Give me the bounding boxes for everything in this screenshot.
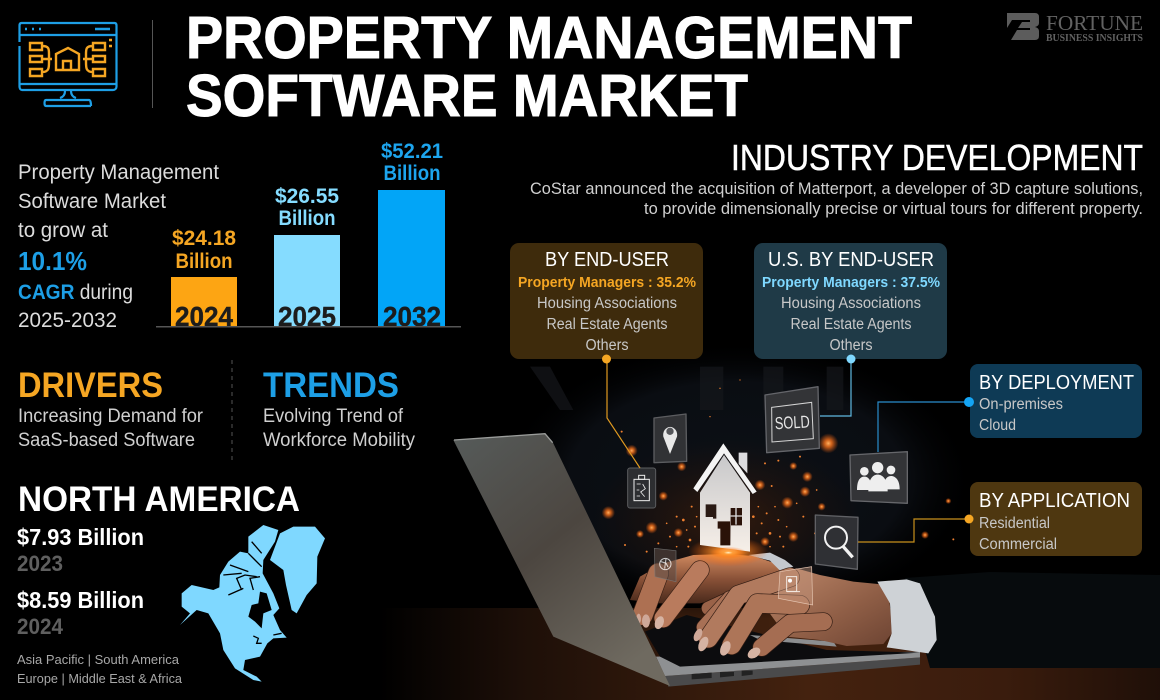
dark backdrop <box>497 340 977 620</box>
market growth text: Property Management <box>18 161 219 184</box>
laptop lid <box>453 433 670 686</box>
panel: U.S. by end-user: U.S. BY END-USER <box>768 249 934 271</box>
industry development: CoStar announced the acquisition of Matterport, a developer of 3D capture solutions, <box>530 179 1143 198</box>
connector: by end-user <box>607 359 640 468</box>
icon: house <box>693 443 757 559</box>
industry development <box>530 137 1143 218</box>
panel: north america: Asia Pacific | South America <box>17 652 180 667</box>
orange haze <box>593 440 860 600</box>
bar 2024: Billion <box>176 250 232 273</box>
bar 2024: 2024 <box>175 301 233 332</box>
panel: U.S. by end-user: Others <box>830 337 873 354</box>
panel: north america: 2023 <box>17 551 63 576</box>
laptop lid and floating icons <box>453 387 907 686</box>
market growth text <box>18 161 219 332</box>
panel: by deployment: BY DEPLOYMENT <box>979 372 1134 394</box>
panel: by end-user: Others <box>586 337 629 354</box>
panel: by deployment <box>964 364 1142 438</box>
divider <box>152 20 153 108</box>
market growth text: CAGR during <box>18 281 133 304</box>
photo: laptop with hands and floating property icons <box>497 340 977 620</box>
title: PROPERTY MANAGEMENT <box>186 5 912 71</box>
panel: by deployment: On-premises <box>979 396 1063 413</box>
particles <box>555 433 951 546</box>
panel: by end-user: Housing Associations <box>537 295 677 312</box>
icon: SOLD card: SOLD <box>774 411 810 433</box>
panel: trends: TRENDS <box>263 366 399 405</box>
panel: trends: Workforce Mobility <box>263 430 415 451</box>
icon: clipboard card <box>628 468 656 508</box>
title: SOFTWARE MARKET <box>186 63 748 129</box>
icon: magnifier card <box>815 515 858 569</box>
panel: by end-user: Property Managers : 35.2% <box>518 275 696 291</box>
market growth text: 2025-2032 <box>18 309 117 332</box>
bar 2025: 2025 <box>278 301 336 332</box>
icon: globe card <box>654 548 676 582</box>
panel: north america: 2024 <box>17 614 64 639</box>
shirt cuff left <box>748 553 793 571</box>
connector: by deployment <box>878 402 968 452</box>
map: North America <box>180 525 325 682</box>
panel: by end-user <box>510 243 703 364</box>
bar chart <box>156 140 461 332</box>
panel: by application: Commercial <box>979 536 1057 553</box>
icon: location pin card <box>654 414 687 463</box>
panel: by application: BY APPLICATION <box>979 490 1130 512</box>
panel: drivers <box>18 366 204 451</box>
right hand <box>692 568 892 661</box>
panel: by end-user: BY END-USER <box>545 249 669 271</box>
panel: U.S. by end-user: Housing Associations <box>781 295 921 312</box>
market growth text: to grow at <box>18 219 108 242</box>
market growth text: Software Market <box>18 190 166 213</box>
logo: Fortune Business Insights: FORTUNE <box>1046 11 1143 35</box>
shirt cuff right <box>877 579 937 653</box>
bar 2024: $24.18 <box>172 227 236 250</box>
panel: by end-user: Real Estate Agents <box>546 316 668 333</box>
logo: Fortune Business Insights <box>1007 11 1143 44</box>
left hand <box>630 554 780 630</box>
connector: by application <box>858 519 968 542</box>
panel: drivers: DRIVERS <box>18 366 163 405</box>
panel: north america: $8.59 Billion <box>17 587 144 613</box>
laptop base <box>645 615 920 687</box>
icon: people card <box>850 452 907 503</box>
panel: by application <box>964 482 1142 556</box>
bar 2025 <box>274 185 340 332</box>
panel: north america: NORTH AMERICA <box>18 480 300 519</box>
bar 2032 <box>378 140 445 332</box>
icon: document card on hand <box>778 567 813 605</box>
panel: north america: $7.93 Billion <box>17 524 144 550</box>
jacket and dark right side <box>905 572 1160 668</box>
panel: north america: Europe | Middle East & Africa <box>17 671 183 686</box>
icon: SOLD card <box>765 387 819 453</box>
blurred background shapes <box>530 367 843 410</box>
wooden table <box>380 608 1160 700</box>
bar 2032: $52.21 <box>381 140 443 163</box>
logo: Fortune Business Insights: BUSINESS INSIGHTS <box>1046 33 1143 44</box>
panel: drivers: SaaS-based Software <box>18 430 195 451</box>
panel: trends: Evolving Trend of <box>263 406 404 427</box>
icon: monitor with property hierarchy <box>20 23 116 106</box>
panel: drivers: Increasing Demand for <box>18 406 204 427</box>
glow under house <box>688 537 768 567</box>
panel: north america <box>17 480 300 686</box>
bar 2025: $26.55 <box>275 185 339 208</box>
title <box>186 5 912 129</box>
panel: U.S. by end-user: Property Managers : 37.5% <box>762 275 940 291</box>
industry development: to provide dimensionally precise or virtual tours for different property. <box>644 199 1143 218</box>
panel: by deployment: Cloud <box>979 417 1016 434</box>
panel: U.S. by end-user: Real Estate Agents <box>790 316 912 333</box>
bar 2032: 2032 <box>383 301 441 332</box>
connector: U.S. by end-user <box>820 359 851 416</box>
market growth text: 10.1% <box>18 246 87 276</box>
panel: U.S. by end-user <box>754 243 947 364</box>
bar 2024 <box>171 227 237 332</box>
panel: trends <box>263 366 415 451</box>
bar 2032: Billion <box>384 162 440 185</box>
laptop and hands <box>630 553 937 687</box>
bar 2025: Billion <box>278 207 336 230</box>
panel: by application: Residential <box>979 515 1050 532</box>
